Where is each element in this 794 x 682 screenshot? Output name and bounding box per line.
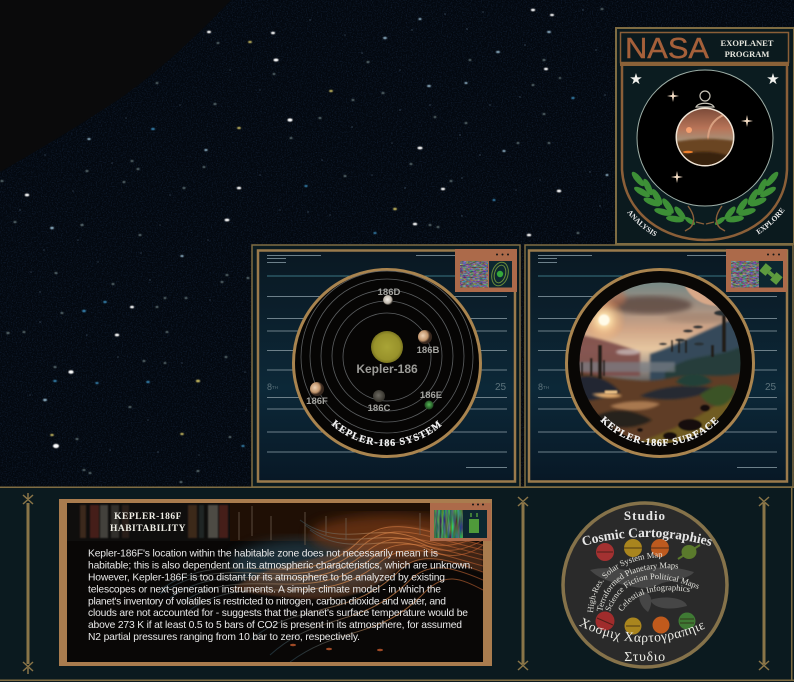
body text: However, Kepler-186F is too distant for its atmosphere to be analyzed by existing (88, 572, 445, 584)
stars: ★ (766, 71, 780, 88)
tab: satellite icon (726, 249, 787, 292)
panel: Kepler-186F surface (524, 244, 794, 486)
NASA wordmark: NASA (625, 33, 710, 65)
footer band (0, 486, 794, 682)
greek title: Στυδιο (624, 650, 666, 665)
planet medallion (676, 108, 734, 166)
box title: HABITABILITY (110, 524, 186, 534)
planet 186C: 186C (368, 403, 390, 414)
box title: KEPLER-186F (114, 512, 182, 522)
arc labels: ANALYSIS (627, 210, 657, 236)
rule lines (267, 256, 507, 468)
header book spines (79, 504, 229, 540)
scale labels: 25 (765, 382, 777, 393)
scale labels: 8 (267, 382, 272, 392)
scale labels: 25 (495, 382, 507, 393)
panel: NASA exoplanet program badge (615, 27, 794, 245)
body text (88, 548, 473, 643)
studio title: Studio (624, 508, 666, 523)
emblem disc (637, 70, 773, 206)
services list: Science Fiction Political Maps (606, 573, 699, 612)
greek title: Χοσμιχ Χαρτογραπηιες (578, 618, 705, 645)
planet 186E (420, 390, 442, 410)
stars: ★ (629, 71, 643, 88)
arc labels (627, 208, 785, 236)
stars (629, 71, 780, 88)
services list (588, 552, 699, 613)
studio title (582, 508, 712, 546)
top planets (596, 539, 700, 561)
system disc (294, 270, 480, 456)
arc labels: EXPLORE (756, 208, 785, 234)
body text: habitable; this is also dependent on its atmospheric characteristics, which are unknown. (88, 560, 473, 572)
program title: PROGRAM (725, 49, 769, 59)
body text: clouds are not accounted for - suggests that the planet's surface temperature would be (88, 608, 468, 619)
dark planet limb (0, 0, 231, 172)
body text: telescopes or next-generation instruments. A simple climate model - in which the (88, 584, 441, 596)
wreath (630, 170, 780, 226)
planet 186D (378, 287, 400, 305)
planet 186F: 186F (306, 396, 328, 407)
body text: above 273 K if at least 0.5 to 5 bars of CO2 is present in its atmosphere, for assumed (88, 620, 462, 631)
planet 186B (417, 330, 439, 356)
wave art (66, 503, 483, 662)
planet 186B: 186B (417, 345, 439, 356)
tab: orbit icon (455, 249, 517, 292)
bottom planets (596, 612, 696, 634)
orbits (301, 271, 473, 443)
wreath stems (685, 206, 725, 231)
star Kepler-186 (356, 331, 418, 376)
body text: N2 partial pressures ranging from 10 bar to zero, respectively. (88, 632, 360, 643)
services list: High-Res. Solar System Maps (588, 552, 662, 613)
system caption: KEPLER-186 SYSTEM (331, 420, 442, 446)
body text: planet's inventory of volatiles is restricted to nitrogen, carbon dioxide and water, and (88, 596, 446, 608)
scale labels (267, 382, 507, 393)
scale labels: TH (543, 385, 549, 390)
planet 186C (368, 390, 390, 414)
surface caption: KEPLER-186F SURFACE (600, 416, 719, 446)
rule lines (538, 256, 777, 468)
surface landscape (580, 282, 740, 444)
scale labels: TH (272, 385, 278, 390)
studio title: Cosmic Cartographies (582, 528, 712, 546)
world map backdrop (590, 567, 694, 612)
program title: EXOPLANET (721, 38, 774, 48)
planet 186F (306, 382, 328, 407)
scale labels (538, 382, 777, 393)
panel: Kepler-186 system (251, 244, 521, 486)
program title (721, 38, 774, 59)
astronaut helmet (696, 91, 714, 107)
services list: Terraformed Planetary Maps (596, 562, 678, 611)
star Kepler-186: Kepler-186 (356, 362, 418, 376)
box title (110, 512, 186, 534)
scale labels: 8 (538, 382, 543, 392)
surface disc (566, 270, 754, 456)
tab: container icon (430, 503, 491, 541)
body text: Kepler-186F's location within the habitable zone does not necessarily mean it is (88, 548, 438, 560)
planet 186E: 186E (420, 390, 442, 401)
ornamental columns (23, 493, 769, 674)
panel: Kepler-186F habitability text box (59, 499, 492, 666)
services list: Celestial Infographics (618, 584, 690, 611)
sparkles (667, 90, 753, 183)
planet 186D: 186D (378, 287, 400, 298)
